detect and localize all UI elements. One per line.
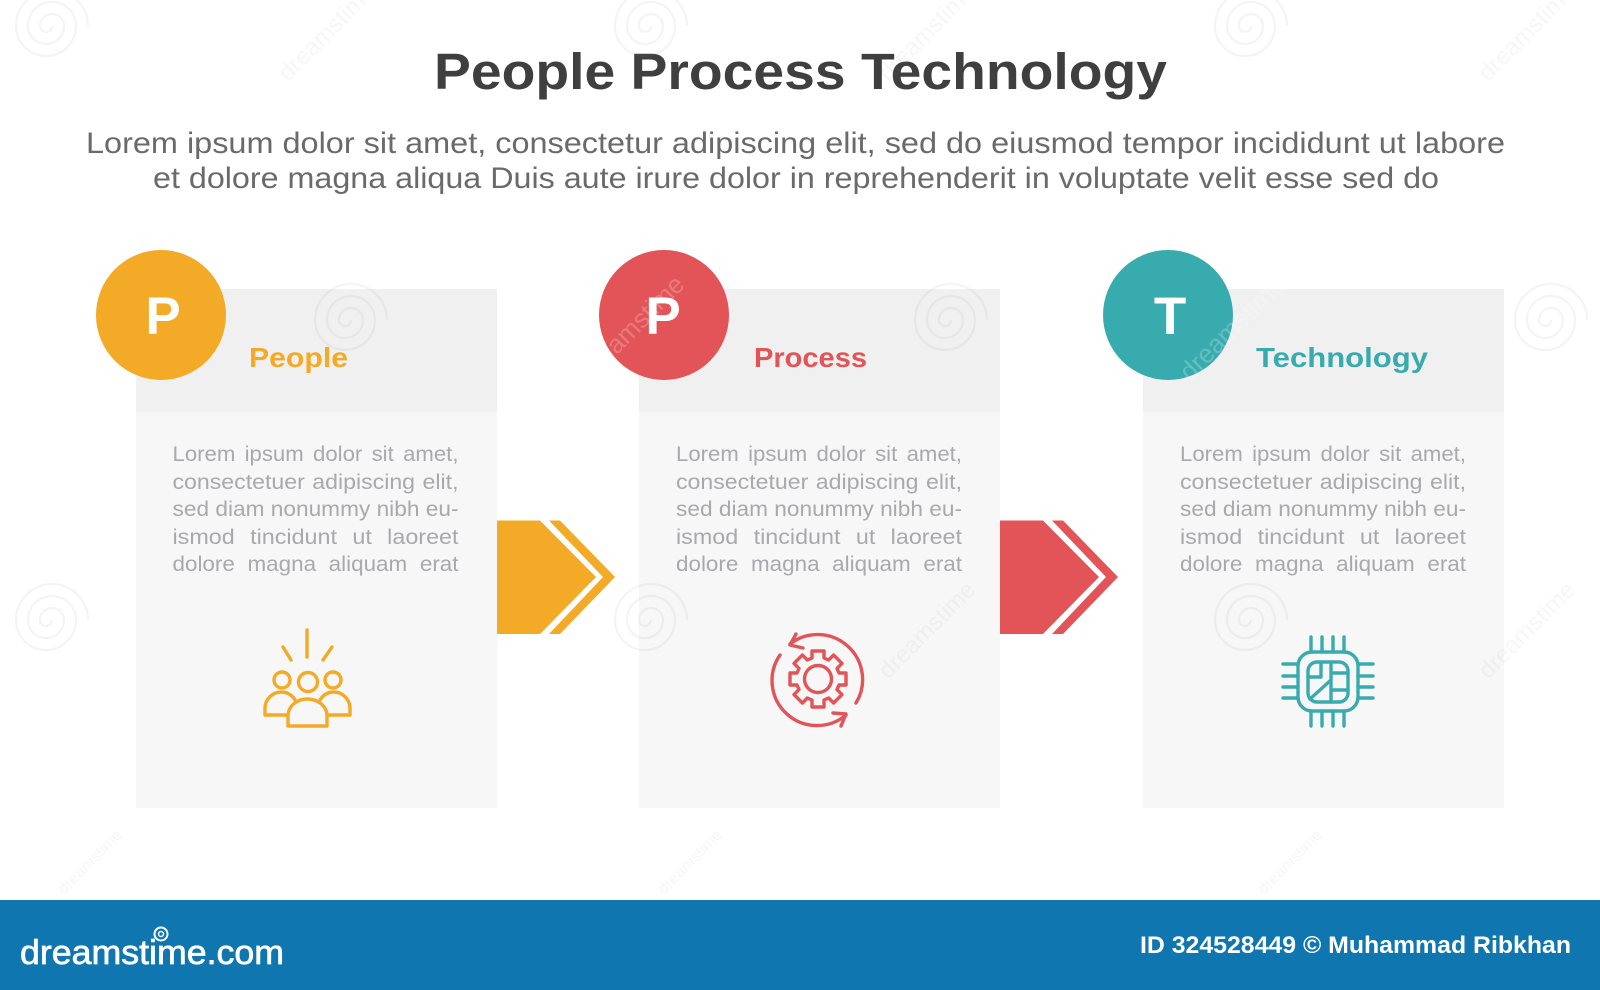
- icon: gear with cycle arrows: [772, 634, 863, 726]
- body text: [676, 443, 962, 576]
- body text: dolore magna aliquam erat: [676, 553, 962, 576]
- badge: P: P: [645, 287, 681, 346]
- body text: sed diam nonummy nibh eu-: [172, 498, 458, 521]
- badge: P: P: [145, 287, 181, 346]
- heading: People: People: [249, 342, 348, 373]
- body text: [172, 443, 459, 576]
- icon: microchip: [1283, 637, 1373, 726]
- body text: ismod tincidunt ut laoreet: [1180, 526, 1466, 549]
- panel: technology: [1103, 250, 1504, 808]
- heading: Technology: Technology: [1256, 342, 1428, 373]
- icon: people group: [265, 630, 350, 726]
- watermark overlay: dreamstime: [873, 576, 981, 684]
- card header: [639, 289, 1000, 412]
- heading: Process: Process: [754, 342, 867, 373]
- watermark overlay: dreamstime: [573, 269, 690, 386]
- subtitle text: [86, 127, 1505, 195]
- body text: consectetuer adipiscing elit,: [172, 471, 458, 494]
- card body: [1143, 289, 1504, 808]
- arrow: process to technology: [1000, 520, 1118, 634]
- subtitle text: et dolore magna aliqua Duis aute irure dolor in reprehenderit in voluptate velit esse sed do: [153, 162, 1439, 195]
- card header: [136, 289, 497, 412]
- watermark overlay: dreamstime: [655, 827, 726, 898]
- body text: ismod tincidunt ut laoreet: [172, 526, 459, 549]
- watermark overlay: dreamstime: [1255, 827, 1326, 898]
- panel: process: [599, 250, 1000, 808]
- body text: dolore magna aliquam erat: [172, 553, 459, 576]
- body text: Lorem ipsum dolor sit amet,: [676, 443, 962, 466]
- watermark overlay: dreamstime: [1473, 576, 1581, 684]
- badge: P: [96, 250, 226, 380]
- card body: [136, 289, 497, 808]
- body text: consectetuer adipiscing elit,: [1180, 471, 1466, 494]
- panel: people: [96, 250, 497, 808]
- arrow: people to process: [497, 520, 615, 634]
- badge: P: [599, 250, 729, 380]
- image credit: ID 324528449 © Muhammad Ribkhan: [1140, 932, 1571, 959]
- subtitle text: Lorem ipsum dolor sit amet, consectetur adipiscing elit, sed do eiusmod tempor incididunt ut labore: [86, 127, 1505, 160]
- badge: T: T: [1154, 287, 1186, 346]
- footer banner: [0, 900, 1600, 990]
- logo wordmark: dreamstime.com: [20, 934, 284, 972]
- body text: sed diam nonummy nibh eu-: [676, 498, 962, 521]
- body text: dolore magna aliquam erat: [1180, 553, 1466, 576]
- card header: [1143, 289, 1504, 412]
- card body: [639, 289, 1000, 808]
- body text: [1180, 443, 1466, 576]
- body text: consectetuer adipiscing elit,: [676, 471, 962, 494]
- body text: Lorem ipsum dolor sit amet,: [172, 443, 459, 466]
- body text: sed diam nonummy nibh eu-: [1180, 498, 1466, 521]
- badge: T: [1103, 250, 1233, 380]
- watermark overlay: dreamstime: [55, 827, 126, 898]
- title: People Process Technology: [434, 43, 1168, 100]
- watermark overlay: dreamstime: [1173, 269, 1290, 386]
- body text: ismod tincidunt ut laoreet: [676, 526, 962, 549]
- body text: Lorem ipsum dolor sit amet,: [1180, 443, 1466, 466]
